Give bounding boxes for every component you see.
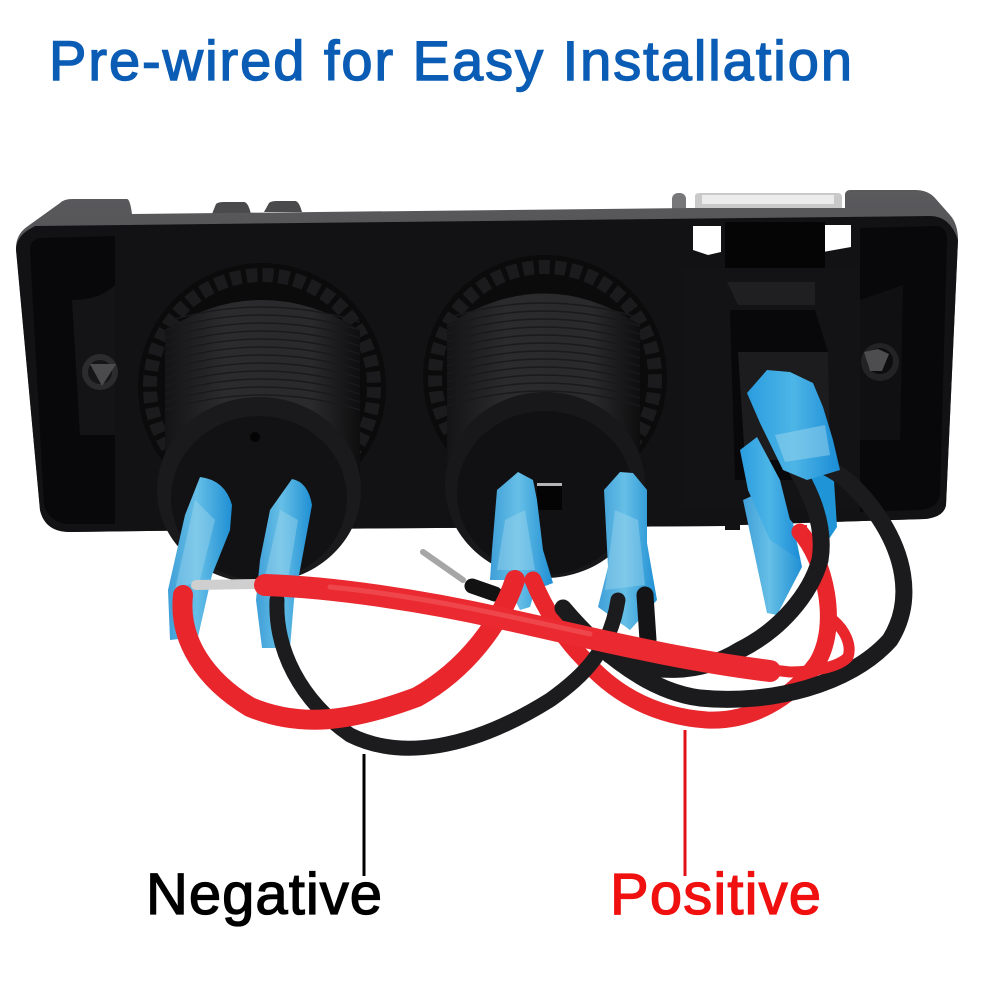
panel: black housing: [16, 190, 958, 532]
rocker switch back: [682, 222, 860, 508]
left recess: [30, 236, 115, 524]
switch panel photo: [16, 190, 958, 748]
title: Pre-wired for Easy Installation: [49, 29, 852, 92]
black wire 2: [563, 463, 904, 699]
leader line: positive: [684, 730, 686, 876]
black wire 3: [610, 470, 821, 669]
long red wire: [265, 585, 849, 672]
blue crimp connectors: [168, 437, 837, 648]
black wire to connector 4: [277, 600, 618, 748]
connector 3: [490, 472, 553, 610]
connector 2: [256, 479, 312, 648]
leader line: negative: [362, 754, 366, 876]
connector 4: [598, 472, 657, 630]
stripped wire end: [196, 584, 258, 585]
left red wire: [182, 580, 515, 720]
rocker switch lens: [672, 193, 842, 215]
second black wire to connector 4: [645, 595, 648, 640]
right socket: [423, 255, 667, 578]
spare terminal: [423, 552, 495, 594]
red visible inside switch connector: [795, 525, 807, 535]
left post: [72, 285, 118, 435]
switch connectors: [740, 437, 837, 615]
top buttons: [212, 201, 302, 214]
connector 1: [168, 477, 232, 640]
square cutouts: [685, 225, 851, 497]
right post: [860, 285, 903, 440]
wires: [182, 463, 904, 748]
right recess: [860, 226, 947, 512]
label: negative: Negative: [146, 862, 382, 927]
right red wire: [533, 532, 828, 720]
upper switch connector sleeve: [747, 370, 840, 480]
label: positive: Positive: [610, 862, 821, 927]
left socket: [138, 263, 386, 583]
